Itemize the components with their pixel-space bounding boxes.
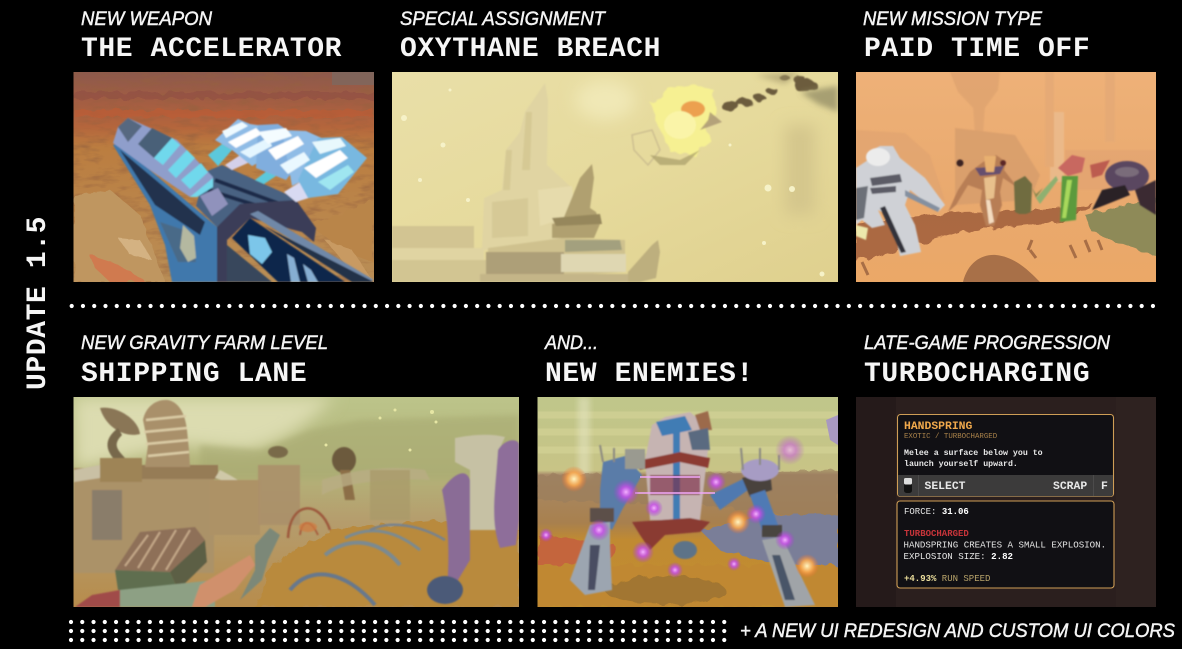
right arm and leg — [710, 478, 748, 510]
footer note: + A NEW UI REDESIGN AND CUSTOM UI COLORS — [740, 621, 1175, 642]
laser lines — [635, 477, 715, 493]
kicker: NEW WEAPON — [81, 9, 212, 30]
heading: paid time off — [863, 9, 1090, 65]
kicker: SPECIAL ASSIGNMENT — [400, 9, 606, 30]
item name: HANDSPRING — [904, 421, 973, 433]
title: TURBOCHARGING — [864, 359, 1090, 390]
spikes — [600, 445, 779, 470]
dish — [100, 408, 140, 435]
panel: the accelerator screenshot — [74, 72, 374, 282]
hazy background structures — [856, 72, 1156, 205]
heading: oxythane breach — [400, 9, 661, 65]
tower — [392, 83, 660, 282]
panel: oxythane breach screenshot — [392, 72, 838, 282]
panel: new enemies screenshot — [538, 397, 838, 607]
magenta glow sparks — [539, 435, 805, 578]
ground debris — [856, 197, 1156, 262]
pale sky — [74, 397, 335, 470]
kicker: LATE-GAME PROGRESSION — [864, 333, 1110, 354]
striped dome tower — [143, 400, 190, 467]
turbocharged label: TURBOCHARGED — [904, 529, 969, 539]
explosion — [632, 72, 838, 165]
title: SHIPPING LANE — [81, 359, 307, 390]
green-sky specks — [324, 408, 438, 452]
turret — [552, 164, 600, 238]
ember specks — [401, 88, 824, 276]
kicker: NEW MISSION TYPE — [863, 9, 1042, 30]
force stat: FORCE: 31.06 — [904, 507, 969, 517]
red arches — [288, 508, 330, 538]
orange hero — [948, 155, 1018, 226]
white robot — [856, 146, 945, 256]
sky bands — [538, 415, 838, 450]
title: THE ACCELERATOR — [81, 34, 342, 65]
far haze and trees — [200, 415, 519, 480]
pale dome — [455, 435, 505, 530]
blue boulder — [427, 576, 463, 604]
farmhouse — [115, 527, 205, 572]
panel: shipping lane screenshot — [74, 397, 519, 607]
scattered leaves — [862, 240, 1102, 275]
panel: paid time off screenshot — [856, 72, 1156, 282]
bonus stat: +4.93% RUN SPEED — [904, 574, 990, 584]
fins — [215, 119, 282, 166]
item rarity: EXOTIC / TURBOCHARGED — [904, 433, 998, 441]
rear stripes deck — [196, 165, 296, 227]
navy panel — [232, 218, 345, 282]
heading: the accelerator — [81, 9, 342, 65]
striped ramp — [192, 555, 255, 607]
scrap action: SCRAP — [1053, 481, 1087, 493]
item card — [898, 414, 1114, 496]
foreground mound — [963, 255, 1040, 282]
mouse icon — [904, 478, 912, 493]
blue ribs — [325, 543, 400, 565]
decorative dot grid — [71, 622, 725, 640]
heading: shipping lane — [81, 333, 328, 390]
left leg — [600, 456, 642, 530]
base buildings — [74, 400, 519, 607]
kicker: AND... — [544, 333, 598, 354]
fire sparks — [561, 466, 819, 578]
title: NEW ENEMIES! — [545, 359, 754, 390]
smoke trail — [721, 75, 818, 111]
octagon frame — [217, 200, 316, 282]
item description: Melee a surface below you to — [904, 448, 1043, 458]
stats card — [897, 501, 1114, 588]
mid towers — [258, 465, 300, 525]
perk description: HANDSPRING CREATES A SMALL EXPLOSION. — [904, 540, 1106, 550]
green blade and red figure — [1036, 155, 1110, 222]
ground patches — [538, 470, 838, 607]
red rings — [632, 452, 710, 470]
item card: launch yourself upward. — [904, 459, 1018, 469]
purple pillars — [442, 473, 470, 590]
panel: turbocharging UI screenshot — [856, 397, 1156, 607]
logo emblem — [248, 235, 272, 264]
stats card: EXPLOSION SIZE: 2.82 — [904, 551, 1013, 562]
orange ground — [255, 520, 519, 607]
base structures — [392, 226, 474, 248]
barrel cylinder — [113, 118, 213, 197]
divider: dotted row — [72, 304, 1153, 308]
title: OXYTHANE BREACH — [400, 34, 661, 65]
body column — [645, 412, 708, 520]
heading: turbocharging — [864, 333, 1110, 390]
purple plant top right — [826, 415, 838, 445]
kicker: NEW GRAVITY FARM LEVEL — [81, 333, 328, 354]
ground rocks — [74, 92, 374, 282]
dark crab creature — [1092, 161, 1156, 215]
key hint: F — [1101, 481, 1108, 493]
title: PAID TIME OFF — [864, 34, 1090, 65]
heading: new enemies — [544, 333, 754, 390]
fin stems — [208, 144, 232, 166]
small green creature — [1014, 176, 1043, 214]
walker enemy — [570, 411, 815, 607]
select action: SELECT — [924, 481, 966, 493]
weapon body — [113, 118, 374, 282]
rotated label: update 1.5: UPDATE 1.5 — [23, 216, 54, 390]
left rail — [113, 143, 217, 282]
